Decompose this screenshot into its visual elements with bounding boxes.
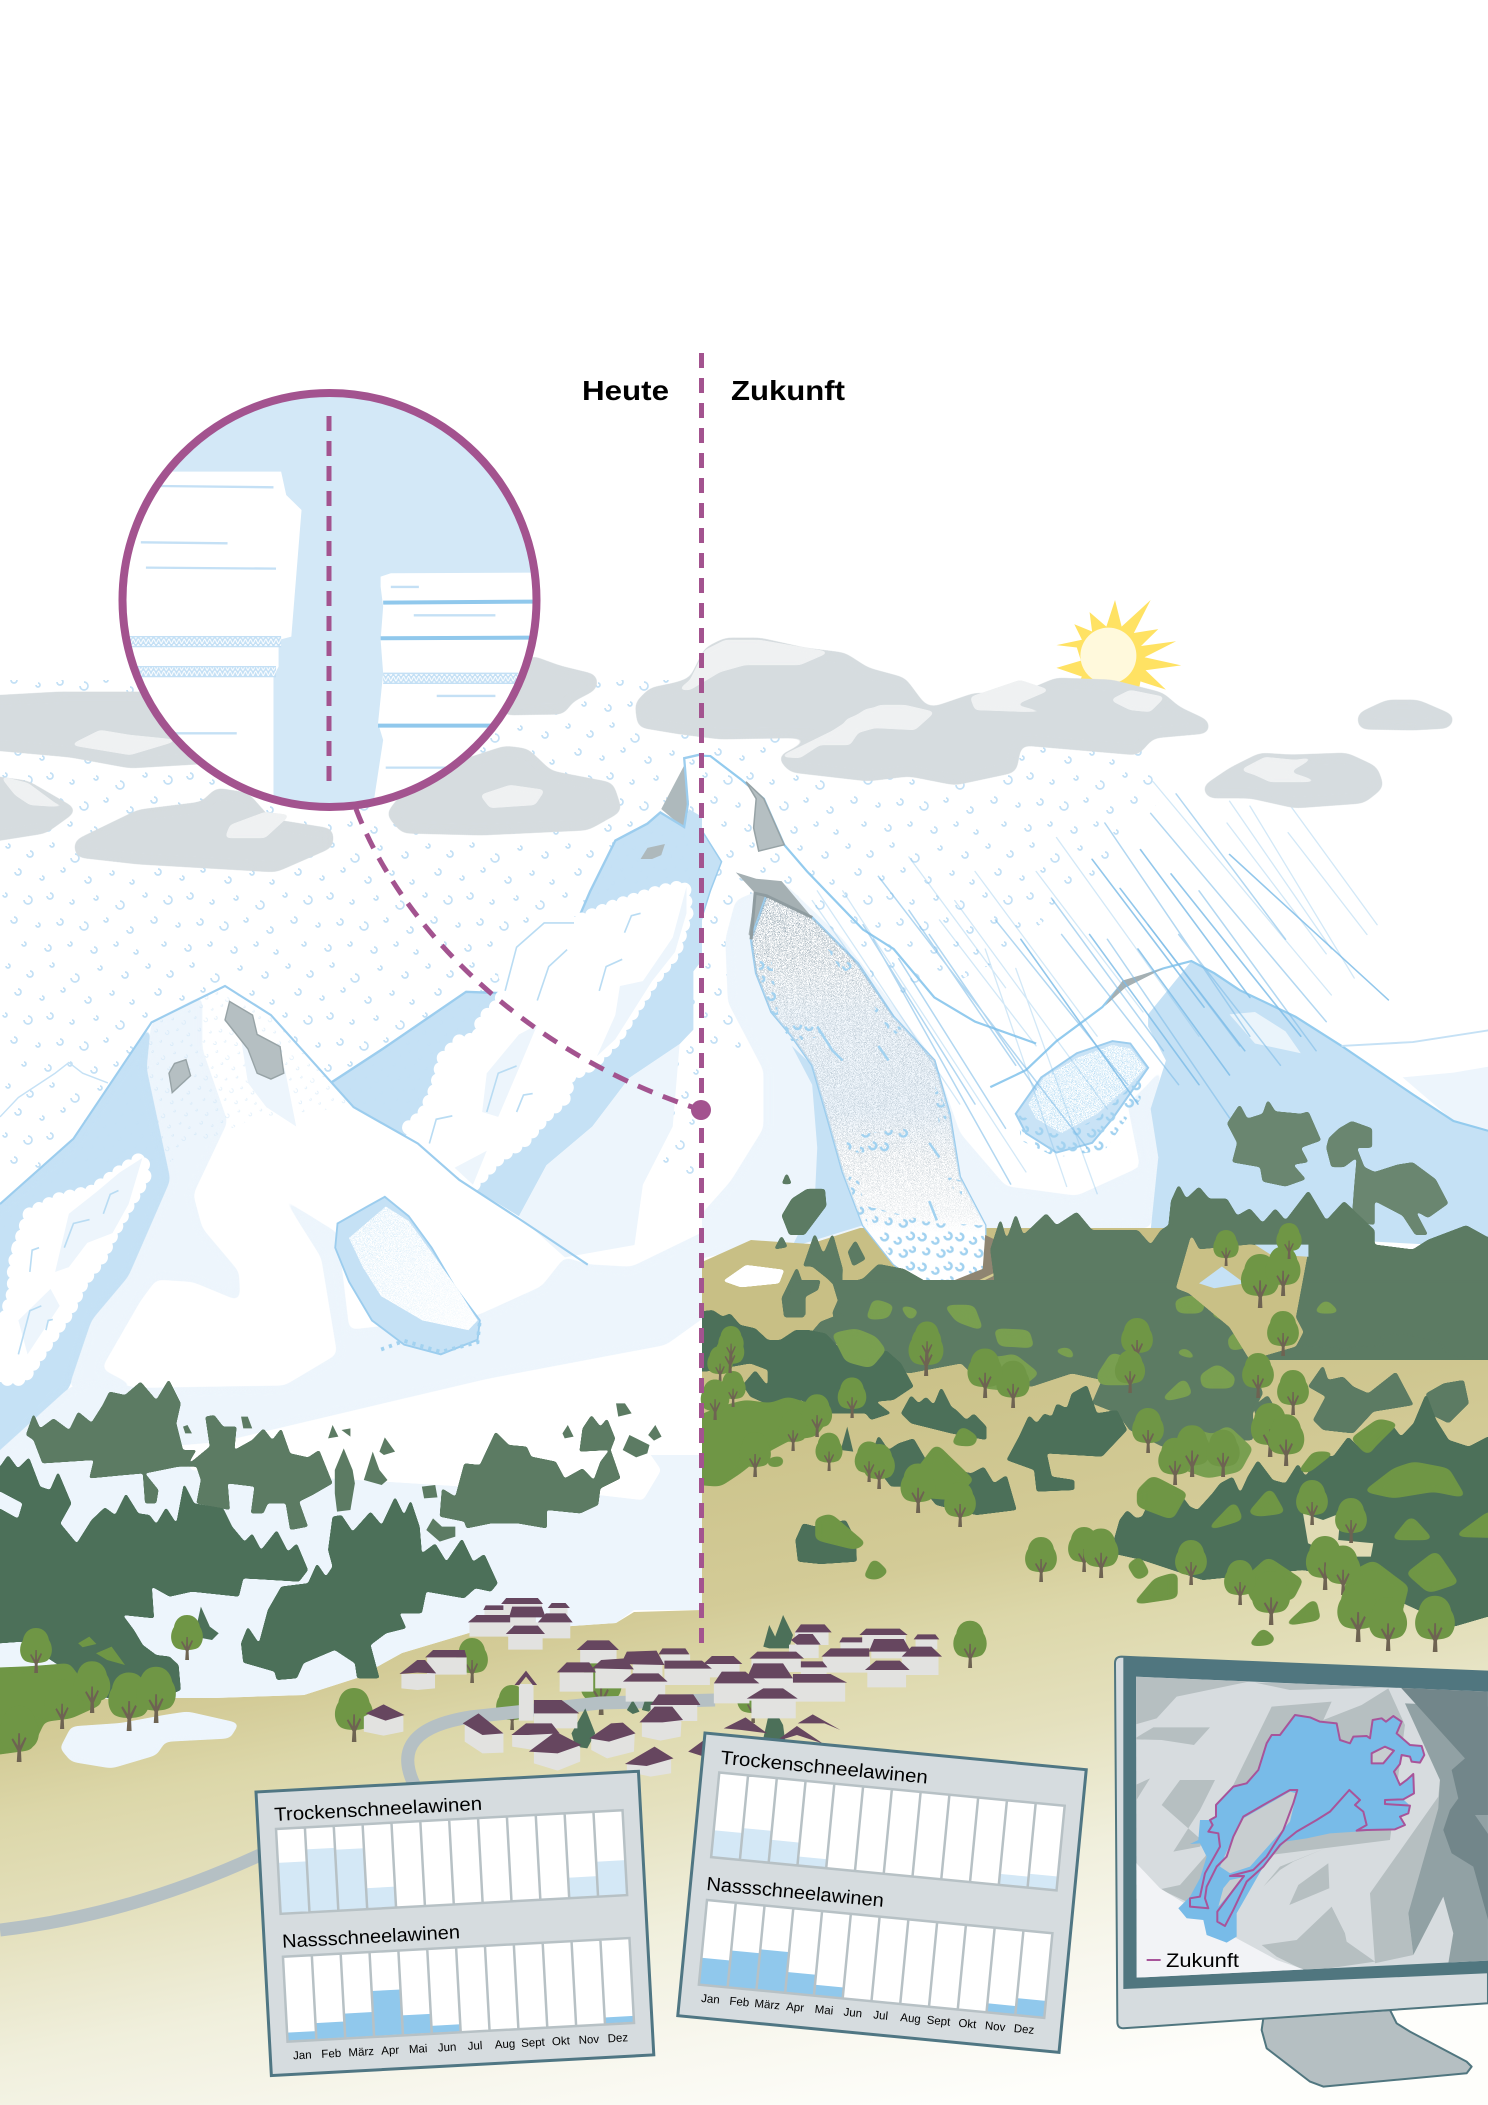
chart card future (678, 1733, 1086, 2052)
forest lower right dark (1112, 1393, 1488, 1627)
forest dark 4 (795, 1520, 857, 1564)
forest mid patches (1253, 1365, 1469, 1433)
month labels future (701, 1993, 1035, 2037)
light snowfield behind left forest (0, 1455, 702, 1700)
snowpack future (373, 573, 544, 807)
connector dot (691, 1100, 711, 1120)
future avalanches (746, 782, 1488, 1360)
release rock (736, 872, 812, 939)
peak small rock (641, 844, 665, 859)
debris (934, 1235, 1125, 1337)
left forest pale right lobe (440, 1415, 620, 1528)
snowfall right (702, 735, 1160, 1060)
cloud right of circle (500, 655, 597, 715)
distant horizon line (1342, 1030, 1488, 1046)
trees (0, 1223, 1455, 1762)
ice layers future (378, 602, 534, 726)
divider dashed (699, 353, 704, 1643)
skewed house walls (364, 1674, 681, 1777)
left forest dark (0, 1455, 308, 1698)
light slope (519, 1044, 680, 1267)
clearing in forest (1303, 1513, 1373, 1557)
snow patch on ground (60, 1712, 239, 1768)
monitor body (1115, 1657, 1488, 2028)
month labels today: Feb (321, 2048, 342, 2061)
monitor stand (1262, 2010, 1472, 2087)
left forest dark right lobe (241, 1497, 498, 1680)
upper forest patch 1 (1227, 1099, 1321, 1186)
blue shoulder (702, 832, 722, 920)
month labels future: März (754, 1998, 781, 2012)
future outline (1190, 1715, 1424, 1926)
deciduous patches (680, 1397, 1488, 1647)
front ridge outline (0, 986, 588, 1265)
conifer blob (783, 1280, 821, 1316)
month labels future: Jul (873, 2009, 889, 2023)
snow pond 1 (1199, 1266, 1245, 1288)
month labels today: Sept (521, 2037, 546, 2050)
month labels today: Mai (409, 2043, 428, 2056)
depth hoar hatch (128, 637, 518, 683)
cloud small right (1357, 700, 1455, 730)
tan clearing (1176, 1235, 1308, 1360)
lower snow band (0, 1204, 702, 1455)
month labels today: Okt (552, 2035, 571, 2048)
wet avalanche bars future (699, 1900, 1052, 2018)
dry avalanche bars future (711, 1773, 1065, 1890)
cloud peak left (635, 638, 927, 739)
conifers near avalanche (774, 1172, 866, 1317)
rock on small ridge (1105, 968, 1163, 1006)
month labels today (293, 2032, 629, 2062)
chart title dry today: Trockenschneelawinen (274, 1794, 483, 1826)
right wet avalanche (1016, 1041, 1148, 1157)
rain (812, 782, 1388, 1194)
road (0, 1700, 715, 1930)
sun (1056, 600, 1181, 695)
cloud left big (0, 692, 232, 768)
clouds behind the circle (0, 638, 1455, 872)
light slope (675, 881, 1166, 1264)
mountains future (675, 755, 1488, 1264)
dry avalanche bars today (276, 1810, 627, 1914)
connector curve (356, 809, 695, 1108)
avalanche snow balls rim (756, 949, 965, 1225)
forest mid dark 3 (873, 1435, 1017, 1515)
map islands (1218, 1747, 1394, 1907)
monitor bezel (1123, 1657, 1488, 1989)
month labels future: Apr (786, 2001, 805, 2015)
left avalanche contours (18, 1191, 118, 1354)
legend label: Zukunft (1166, 1951, 1240, 1972)
cloud peak right (777, 678, 1209, 785)
month labels future: Feb (729, 1996, 750, 2009)
month labels future: Mai (814, 2004, 834, 2018)
terrain dark (1400, 1687, 1488, 1927)
white slope behind left forest (190, 1450, 661, 1500)
chart title wet today: Nassschneelawinen (282, 1922, 460, 1953)
month labels today: Apr (381, 2045, 400, 2058)
deciduous mass left (0, 1663, 105, 1757)
back mountain flakes (331, 812, 701, 1117)
map blue (1178, 1715, 1424, 1943)
heading: Heute: Heute (582, 375, 669, 406)
ridge outlines (690, 755, 1488, 1131)
cloud lower left (74, 788, 333, 872)
dust cloud contours (429, 913, 641, 1144)
magnifier ring (122, 393, 536, 807)
summit rock (746, 782, 784, 851)
roofs (366, 1598, 942, 1766)
rock large (225, 1001, 284, 1079)
main avalanche body (746, 891, 990, 1288)
forest left dark (680, 1310, 914, 1420)
month labels today: Jul (467, 2040, 483, 2053)
month labels today: Dez (607, 2032, 629, 2045)
left forest (0, 1379, 662, 1768)
left powder avalanche (0, 1158, 145, 1379)
wet avalanche bars today (283, 1938, 634, 2042)
main forest upper (833, 1184, 1488, 1360)
month labels future: Okt (958, 2018, 978, 2031)
month labels today: März (348, 2046, 375, 2059)
thin layers (141, 486, 495, 768)
month labels future: Dez (1013, 2023, 1035, 2037)
terrain grey (1133, 1675, 1450, 1972)
right mountain (1148, 961, 1488, 1249)
rock small (169, 1060, 191, 1093)
deciduous patches lighter (832, 1295, 1341, 1478)
forest upper mass (811, 1280, 1488, 1447)
flakes on front face (146, 992, 346, 1162)
month labels future: Nov (984, 2020, 1006, 2034)
forest mid dark 1 (901, 1387, 986, 1440)
chart card today (256, 1771, 654, 2076)
snow patch on hill (723, 1265, 784, 1287)
month labels future: Aug (900, 2012, 921, 2026)
heading: Zukunft: Zukunft (731, 375, 845, 406)
month labels today: Jun (438, 2042, 457, 2055)
chart title wet future: Nassschneelawinen (705, 1874, 885, 1912)
snow pocket in forest (0, 1490, 22, 1518)
snowpack today (115, 472, 302, 807)
ground (0, 1228, 1488, 2105)
scattered pale conifers (183, 1403, 662, 1542)
upper forest patch 2 (1326, 1121, 1448, 1235)
forest dark small (841, 1427, 853, 1452)
front mountain light face (69, 996, 240, 1388)
mountains today (0, 754, 716, 1495)
month labels future: Jan (701, 1993, 720, 2007)
cloud left small (0, 773, 78, 845)
month labels future: Sept (926, 2015, 952, 2029)
cloud centre left (386, 746, 622, 835)
small avalanche (335, 1197, 487, 1354)
blue shadow (792, 1046, 863, 1247)
forest mid dark 2 (1007, 1385, 1127, 1492)
village (364, 1598, 942, 1777)
back mountain blue face (331, 809, 716, 1216)
left avalanche shading (18, 1158, 142, 1354)
month labels today: Jan (293, 2049, 312, 2062)
forest future (680, 1280, 1488, 1647)
depth hoar layers (128, 642, 518, 678)
cloud right (1202, 753, 1384, 808)
peak summit rock (661, 765, 689, 828)
month labels today: Aug (494, 2038, 516, 2051)
upper houses walls (427, 1603, 939, 1728)
legend line (1147, 1957, 1161, 1963)
dark conifer small (194, 1607, 219, 1640)
rock shadow (241, 1039, 296, 1127)
month labels future: Jun (843, 2007, 863, 2020)
avalanche furrows (817, 1027, 939, 1220)
cloud highlights (0, 640, 1320, 838)
conifers near houses (571, 1615, 793, 1748)
ridge outline (331, 754, 701, 1083)
map screen (1133, 1673, 1488, 1980)
left forest pale (26, 1379, 333, 1530)
green patch (78, 1637, 125, 1665)
avalanche dust cloud (409, 887, 687, 1185)
front mountain blue face (0, 1032, 170, 1450)
dust cloud shading (455, 887, 687, 1185)
monitor (1115, 1657, 1488, 2087)
magnifier inner divider (326, 416, 332, 782)
snowfall left (0, 680, 702, 1180)
magnifier snowpack (115, 393, 544, 807)
clearing and ponds in forest (723, 1235, 1308, 1360)
front mountain silhouette (202, 996, 634, 1266)
white patch (1136, 1166, 1138, 1168)
avalanche snow balls bottom (866, 1206, 990, 1284)
distant ridge (0, 1063, 108, 1117)
terrain mid (1405, 1703, 1488, 1963)
month labels today: Nov (578, 2034, 600, 2047)
snow pond 2 (1255, 1245, 1308, 1257)
chart title dry future: Trockenschneelawinen (720, 1748, 929, 1789)
white plain (1133, 1860, 1303, 1980)
mountain highlight (1230, 1012, 1301, 1053)
right slope light (1403, 1067, 1488, 1129)
